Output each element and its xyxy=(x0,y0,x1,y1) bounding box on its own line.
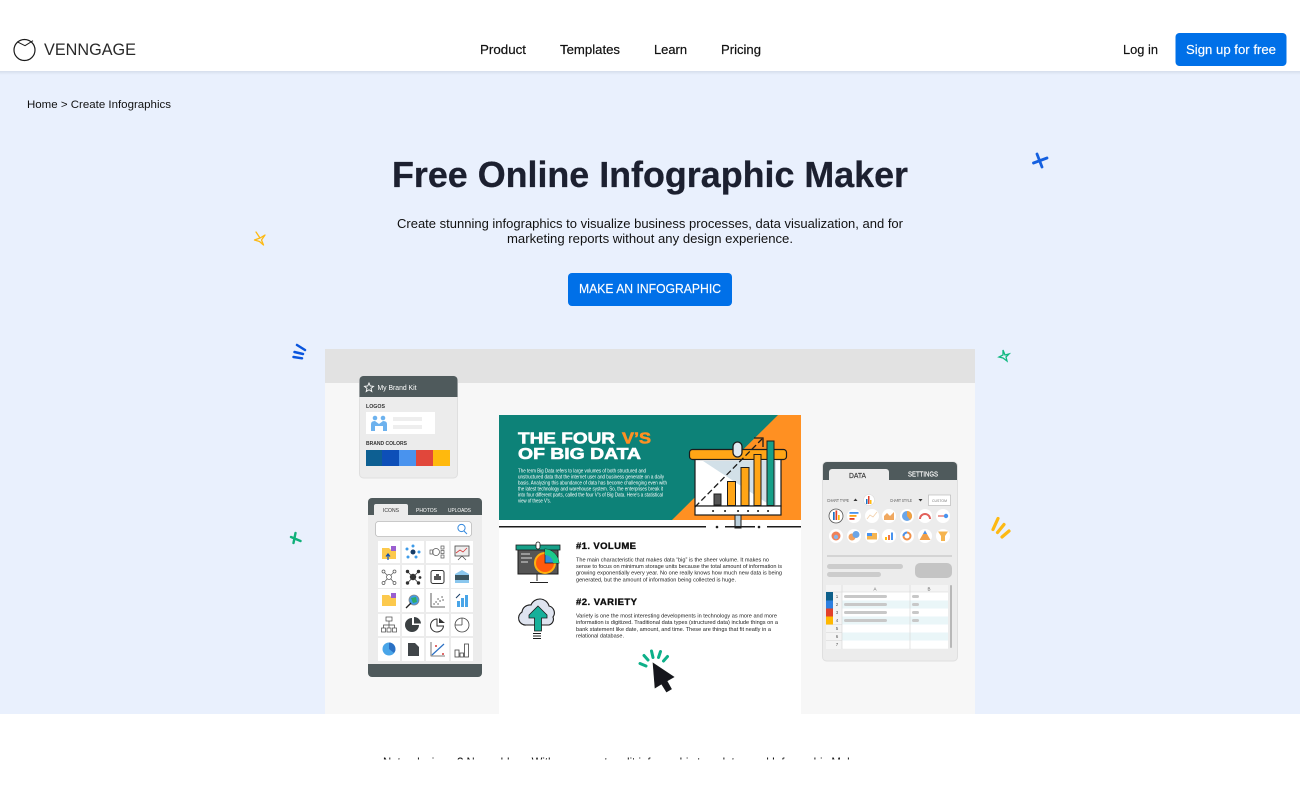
decoration: blue dashes xyxy=(294,345,305,358)
colour swatches xyxy=(366,450,450,466)
icon: folder upload xyxy=(382,546,396,560)
banner title xyxy=(518,430,651,463)
text: variety paragraph: relational database. xyxy=(576,634,624,640)
data table: 2 xyxy=(836,602,839,607)
sign up button xyxy=(1176,33,1286,66)
subheading: marketing reports without any design experience. xyxy=(507,231,793,246)
tab: data: DATA xyxy=(849,473,866,480)
icon: blue bar chart xyxy=(456,594,468,607)
call to action button xyxy=(568,273,732,306)
chart style control: CUSTOM xyxy=(932,498,947,503)
logos label: LOGOS xyxy=(366,404,386,410)
banner title: THE FOUR xyxy=(518,430,616,448)
text: volume paragraph: growing exponentially every year. No one really knows how much new data is being xyxy=(576,571,782,577)
banner divider xyxy=(499,526,801,528)
sign up button: Sign up for free xyxy=(1186,42,1276,57)
decoration: green sparkle xyxy=(999,350,1009,361)
decoration: yellow dashes xyxy=(993,518,1009,537)
icon: dark network xyxy=(406,570,421,584)
nav links: Pricing xyxy=(721,42,761,57)
icon: cursor with click ticks xyxy=(640,651,674,692)
chart style control: CHART STYLE xyxy=(890,498,912,503)
tab: uploads: UPLOADS xyxy=(448,508,471,514)
icon: flow hierarchy xyxy=(430,546,444,558)
icon: star xyxy=(364,383,374,392)
icon: outline pie xyxy=(431,618,445,632)
chart type control: CHART TYPE xyxy=(827,498,849,503)
text: variety paragraph: Variety is one the most interesting developments in technology as more and more xyxy=(576,613,777,619)
banner paragraph xyxy=(518,469,667,505)
data table: 3 xyxy=(836,610,839,615)
data table: B xyxy=(927,586,931,592)
data table: 5 xyxy=(836,626,839,631)
text: variety paragraph: bank statement like date, amount, and time. These are things that fit neatly in a xyxy=(576,627,771,633)
icon: blue network xyxy=(406,544,420,558)
nav links: Product xyxy=(480,42,526,57)
decoration: blue cross xyxy=(1034,154,1047,167)
icon: server box xyxy=(431,570,444,584)
panel: infographic document xyxy=(499,415,801,714)
log in link: Log in xyxy=(1123,42,1158,57)
subheading: Create stunning infographics to visualize business processes, data visualization, and for xyxy=(397,216,904,231)
icon: presentation board xyxy=(455,546,469,560)
tab: icons: ICONS xyxy=(383,508,399,514)
breadcrumb: Home > Create Infographics xyxy=(27,99,172,111)
decoration: yellow sparkle xyxy=(254,232,265,245)
data table xyxy=(826,585,952,649)
decoration: green cross xyxy=(291,533,300,543)
tab: settings: SETTINGS xyxy=(908,472,938,478)
orange diagonal xyxy=(672,415,801,520)
editor top bar xyxy=(325,349,975,383)
banner paragraph: basis. Analyzing this abundance of data has become challenging even with xyxy=(518,481,667,487)
text: variety paragraph xyxy=(576,613,778,640)
heading: #2 variety: #2. VARIETY xyxy=(576,597,638,608)
text: volume paragraph xyxy=(576,558,782,583)
search box xyxy=(376,522,472,536)
icon grid xyxy=(378,541,473,661)
banner paragraph: The term Big Data refers to large volumes of both structured and xyxy=(518,469,646,475)
icon: blue pie xyxy=(382,642,396,656)
banner paragraph: into four different parts, called the four V's of Big Data. Here's a statistical xyxy=(518,493,663,499)
data table: A xyxy=(873,586,877,592)
icon: outline bars xyxy=(455,644,468,657)
text: volume paragraph: The main characteristic that makes data “big” is the sheer volume. It makes no xyxy=(576,558,769,564)
heading: Free Online Infographic Maker xyxy=(392,154,908,195)
banner paragraph: view of these V's. xyxy=(518,499,551,505)
icon: line chart xyxy=(431,642,445,656)
icon: solid pie xyxy=(405,617,421,632)
chart style control xyxy=(890,495,950,506)
navigation bar xyxy=(14,33,1286,66)
banner title: OF BIG DATA xyxy=(518,446,642,463)
separator xyxy=(827,556,952,557)
icon: org chart xyxy=(382,617,396,632)
nav links xyxy=(480,42,761,57)
brand colors label: BRAND COLORS xyxy=(366,441,408,447)
tab: photos: PHOTOS xyxy=(416,508,437,514)
tab: data xyxy=(829,469,889,481)
data table: 1 xyxy=(836,594,839,599)
panel: icons library xyxy=(368,498,482,677)
logo: VENNGAGE xyxy=(44,41,136,59)
text: volume paragraph: sense to focus on minimum storage units because the total amount of information is xyxy=(576,564,782,570)
icon: presentation chart xyxy=(690,438,786,528)
icon: variety cloud upload xyxy=(519,599,554,638)
panel: chart settings xyxy=(822,462,958,661)
chart type control xyxy=(827,494,874,506)
text: variety paragraph: information is digitized. Traditional data types (structured data) include things on a xyxy=(576,620,778,626)
icon: folder xyxy=(382,593,396,606)
editor mockup panel xyxy=(325,349,975,714)
data table: 4 xyxy=(836,618,839,623)
logo card xyxy=(366,412,435,434)
data input placeholders xyxy=(827,563,952,578)
nav links: Templates xyxy=(560,42,621,57)
data table: 7 xyxy=(836,642,839,647)
logo xyxy=(14,40,136,60)
banner title: V’S xyxy=(622,430,651,448)
banner paragraph: the latest technology and warehouse system. So, the enterprises break it xyxy=(518,487,663,493)
heading: #1 volume: #1. VOLUME xyxy=(576,541,636,552)
banner paragraph: unstructured data that the internet user and business generate on a daily xyxy=(518,475,664,481)
panel: brand kit xyxy=(360,376,458,478)
icon: scatter plot xyxy=(431,593,445,607)
icon: globe target xyxy=(406,595,419,608)
icon: thin pie xyxy=(455,618,469,632)
call to action button: MAKE AN INFOGRAPHIC xyxy=(579,281,721,296)
nav links: Learn xyxy=(654,42,687,57)
chart type icons xyxy=(829,509,950,543)
brand kit title: My Brand Kit xyxy=(378,385,417,392)
infographic banner xyxy=(499,415,801,528)
clipped intro text: Not a designer? No problem. With our easy to edit infographic templates and Infographic Maker xyxy=(383,755,863,769)
icon: volume presentation xyxy=(516,542,560,582)
data table: 6 xyxy=(836,634,839,639)
subheading xyxy=(397,216,904,246)
icon: outline network xyxy=(382,570,396,584)
text: volume paragraph: generated, but the amount of information being collected is huge. xyxy=(576,577,736,583)
icon: document xyxy=(408,643,419,656)
tab: icons xyxy=(374,504,408,515)
icon: wallet card xyxy=(455,570,469,583)
